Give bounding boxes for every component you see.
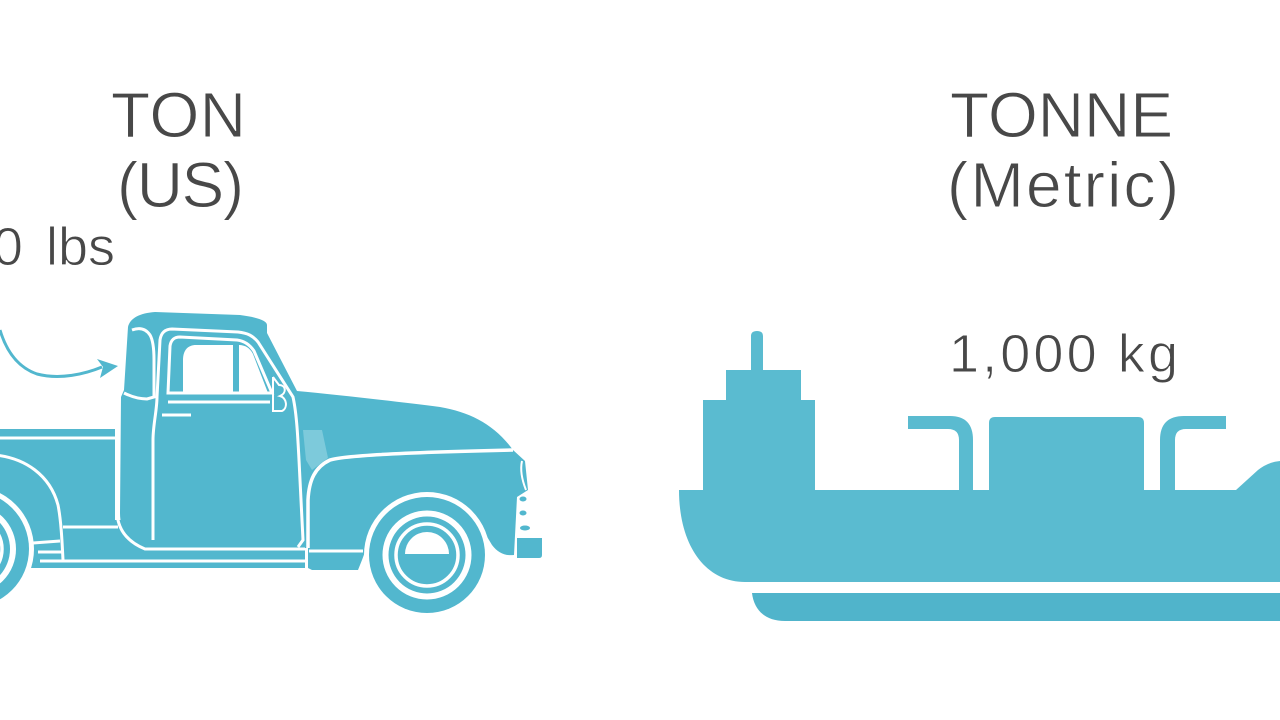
heading: ton (US): (US) — [117, 149, 244, 221]
icon: pickup truck — [0, 312, 542, 618]
heading: tonne (metric) — [947, 79, 1179, 221]
truck outline details — [0, 329, 526, 561]
heading: tonne (metric): TONNE — [950, 79, 1173, 151]
heading: ton (US): TON — [111, 79, 246, 151]
hood highlight — [303, 430, 328, 470]
running boards — [36, 548, 305, 568]
heading: ton (US) — [111, 79, 246, 221]
truck body silhouette — [120, 312, 528, 570]
arrow: weight to truck — [0, 330, 118, 378]
truck bed — [0, 429, 145, 568]
rear wheel — [0, 486, 34, 612]
windows — [183, 345, 233, 393]
keel — [752, 593, 1280, 621]
label: metric tonne weight: 1,000 kg — [949, 324, 1178, 384]
front bumper and lights — [517, 496, 542, 558]
front wheel — [364, 492, 490, 618]
heading: tonne (metric): (Metric) — [947, 149, 1179, 221]
icon: cargo ship — [679, 331, 1280, 621]
hull and superstructure — [679, 331, 1280, 582]
